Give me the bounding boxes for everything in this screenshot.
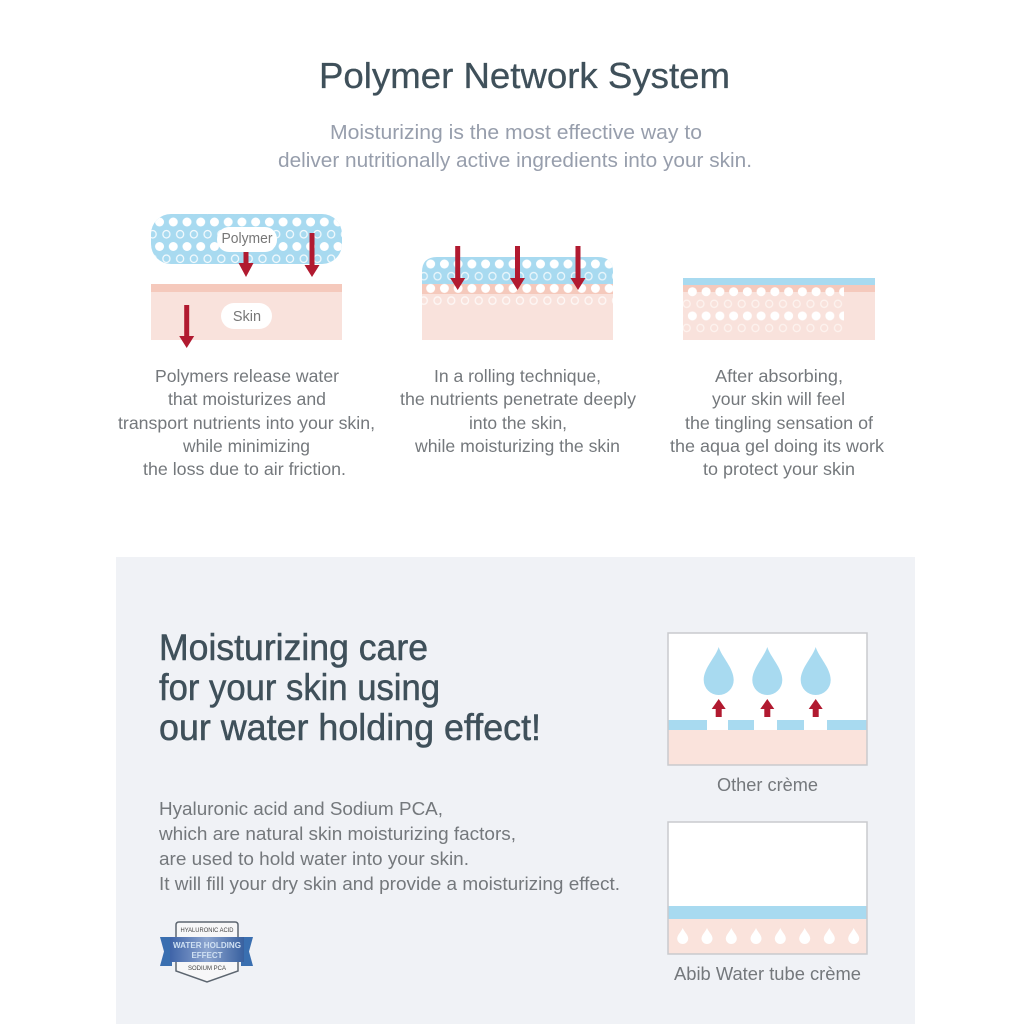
- caption: step 2: In a rolling technique,: [434, 366, 601, 386]
- caption: step 3: [670, 366, 884, 479]
- caption: step 3: to protect your skin: [703, 459, 855, 479]
- arrow: up 2: [760, 699, 774, 717]
- caption: step 2: the nutrients penetrate deeply: [400, 389, 636, 409]
- caption: step 1: [118, 366, 375, 479]
- heading: our water holding effect!: [159, 707, 541, 748]
- caption: step 3: the aqua gel doing its work: [670, 436, 884, 456]
- caption: step 2: into the skin,: [469, 413, 567, 433]
- caption: step 3: the tingling sensation of: [685, 413, 873, 433]
- caption: step 1: the loss due to air friction.: [143, 459, 346, 479]
- body text: [158, 798, 620, 894]
- badge: water holding effect: EFFECT: [191, 951, 223, 960]
- diagram: Abib water tube creme: [668, 822, 867, 954]
- body text: Hyaluronic acid and Sodium PCA,: [159, 798, 443, 819]
- diagram: rolling technique: [422, 246, 613, 340]
- caption: step 3: your skin will feel: [712, 389, 845, 409]
- diagram: polymer above skin: [151, 214, 342, 348]
- body text: which are natural skin moisturizing factors,: [158, 823, 516, 844]
- subtitle: [278, 121, 752, 172]
- badge: water holding effect: HYALURONIC ACID: [180, 927, 234, 934]
- body text: It will fill your dry skin and provide a moisturizing effect.: [159, 873, 620, 894]
- icon: water drop 2: [752, 647, 782, 695]
- label: Skin: [221, 303, 272, 329]
- caption: step 3: After absorbing,: [715, 366, 843, 386]
- diagram: absorbed: [683, 278, 875, 340]
- panel: water holding effect: [116, 557, 915, 1024]
- arrow: skin down: [179, 305, 194, 348]
- caption: step 1: Polymers release water: [155, 366, 339, 386]
- caption: step 1: that moisturizes and: [168, 389, 326, 409]
- badge: water holding effect: [160, 922, 253, 982]
- caption: step 1: while minimizing: [182, 436, 310, 456]
- icon: water drop 1: [704, 647, 734, 695]
- arrow: right: [570, 246, 586, 290]
- heading: Moisturizing care: [159, 627, 428, 668]
- body text: are used to hold water into your skin.: [159, 848, 469, 869]
- label: Polymer: Polymer: [222, 231, 273, 247]
- arrow: long down: [304, 233, 320, 277]
- caption: step 2: while moisturizing the skin: [414, 436, 620, 456]
- badge: water holding effect: WATER HOLDING: [173, 941, 241, 950]
- badge: water holding effect: SODIUM PCA: [188, 965, 227, 972]
- label: Skin: Skin: [233, 309, 261, 325]
- arrow: short down: [238, 252, 254, 277]
- icon: water drop 3: [801, 647, 831, 695]
- heading: [159, 627, 541, 748]
- arrow: up 1: [712, 699, 726, 717]
- label: other creme: Other crème: [717, 775, 818, 795]
- subtitle: Moisturizing is the most effective way to: [330, 121, 702, 144]
- title: Polymer Network System: [319, 55, 730, 96]
- icons: white drops: [677, 928, 859, 944]
- label: Abib water tube creme: Abib Water tube crème: [674, 964, 861, 984]
- label: Polymer: [217, 227, 277, 252]
- heading: for your skin using: [159, 667, 440, 708]
- diagram: other creme: [668, 633, 867, 765]
- caption: step 1: transport nutrients into your skin,: [118, 413, 375, 433]
- arrow: left: [450, 246, 465, 290]
- caption: step 2: [400, 366, 636, 456]
- arrow: middle: [510, 246, 525, 290]
- arrow: up 3: [809, 699, 823, 717]
- subtitle: deliver nutritionally active ingredients into your skin.: [278, 149, 752, 172]
